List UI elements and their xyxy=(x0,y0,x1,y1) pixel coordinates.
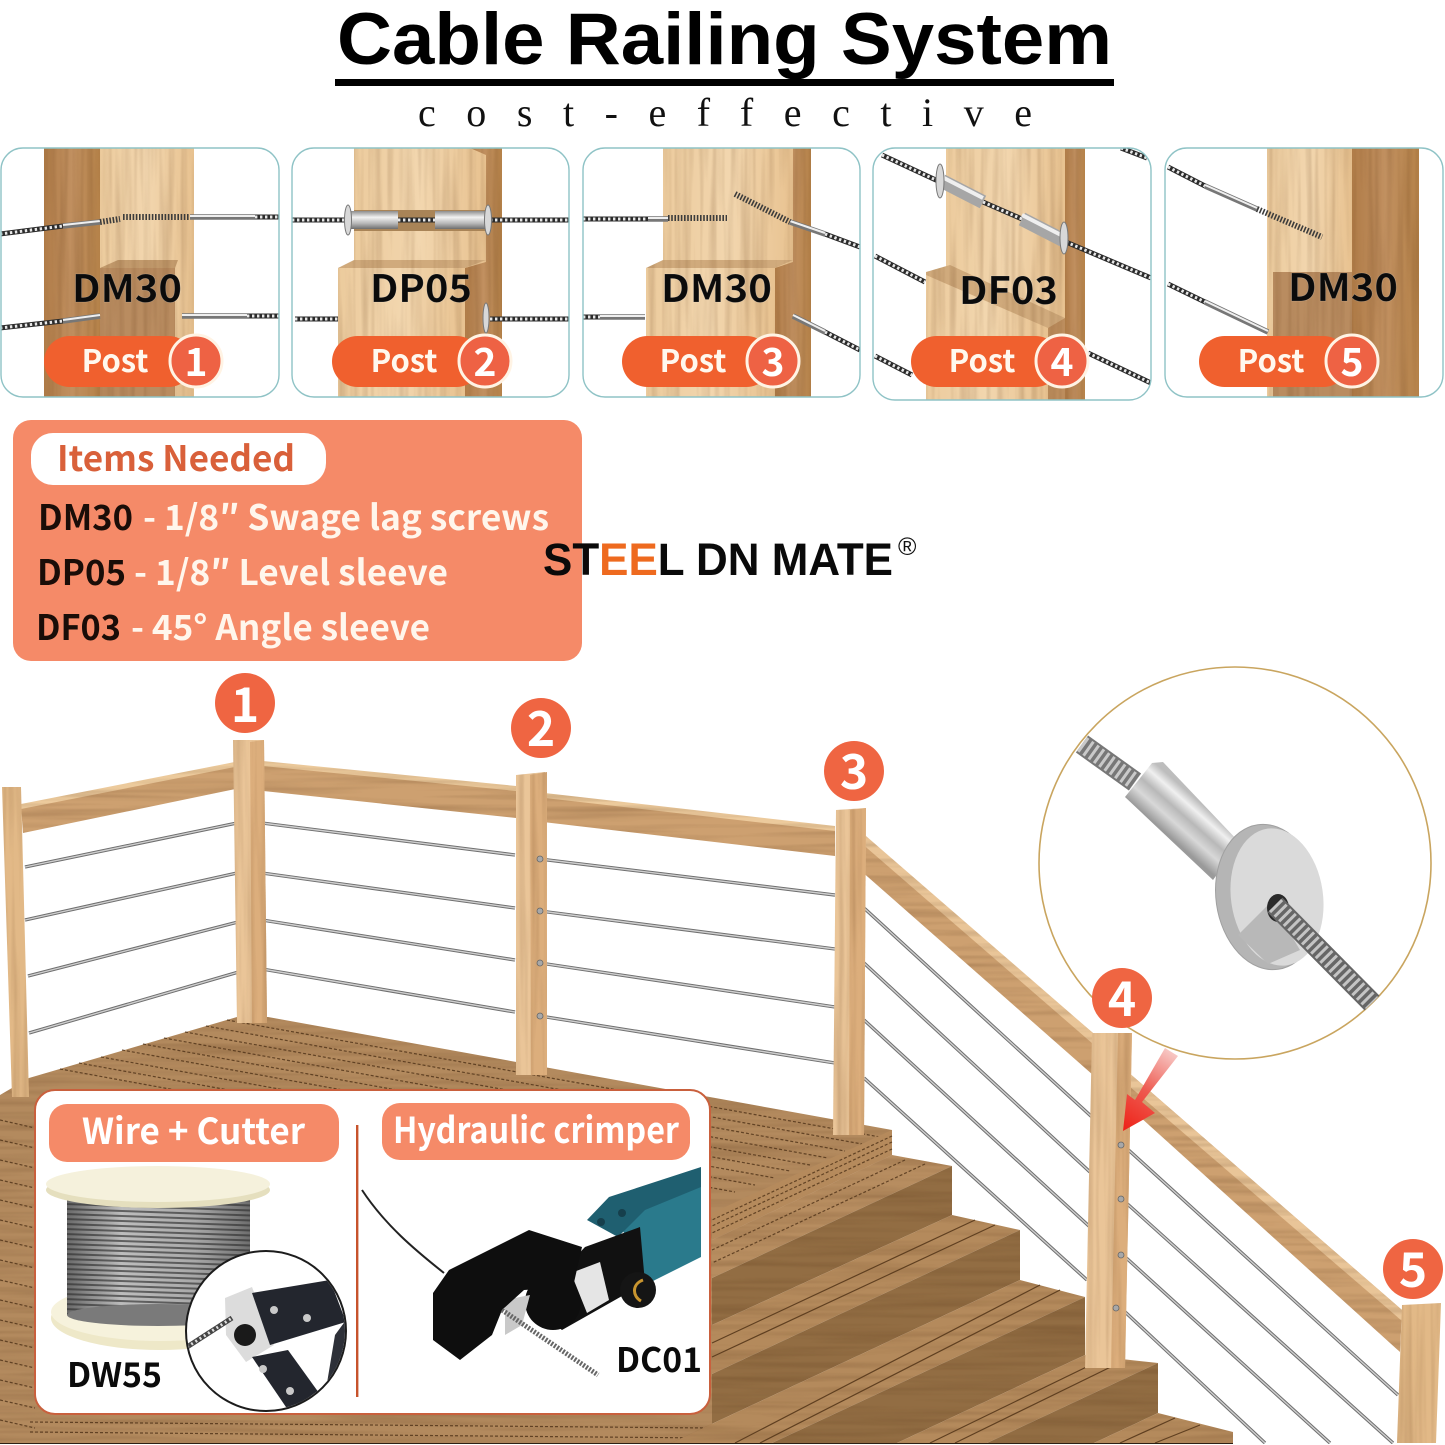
panel: post 2: Post xyxy=(371,336,437,381)
number badge 3: 3 xyxy=(840,733,868,803)
item DP05: DP05 xyxy=(37,545,126,596)
cables xyxy=(25,823,1398,1443)
icon: wire cutter xyxy=(186,1251,346,1411)
panel: post 3: Post xyxy=(660,336,726,381)
panel: post 3: DM30 xyxy=(661,258,772,313)
heading: wire + cutter: Wire + Cutter xyxy=(82,1103,305,1155)
panel: post 1: 1 xyxy=(184,332,208,388)
item DF03: DF03 xyxy=(36,600,121,651)
panel: post 2: DP05 xyxy=(370,258,472,313)
panel: post 5: Post xyxy=(1238,336,1304,381)
railing scene xyxy=(0,740,1441,1444)
number badge 4 xyxy=(1092,960,1152,1030)
stairs xyxy=(0,1155,1233,1444)
items heading: Items Needed xyxy=(57,431,295,482)
callout: fitting close-up xyxy=(1039,667,1431,1059)
number badge 4: 4 xyxy=(1108,960,1136,1030)
deck floor xyxy=(0,1017,892,1443)
label: DW55: DW55 xyxy=(67,1348,162,1397)
cable strand lower xyxy=(1275,905,1372,1003)
panel: post 4: Post xyxy=(949,336,1015,381)
subtitle: cost-effective xyxy=(418,90,1032,135)
item DF03: - 45° Angle sleeve xyxy=(131,600,430,651)
panel: post 2 xyxy=(292,148,569,397)
panel: post 4: DF03 xyxy=(959,260,1058,315)
label: DC01: DC01 xyxy=(616,1333,702,1382)
icon: hydraulic crimper xyxy=(362,1167,701,1375)
panel: post 1 xyxy=(0,148,279,397)
item DM30: DM30 xyxy=(38,490,133,541)
panel: post 2: 2 xyxy=(473,332,497,388)
panel: items needed xyxy=(13,420,582,661)
number badge 3 xyxy=(824,733,884,803)
heading: wire + cutter xyxy=(49,1103,339,1162)
item DP05: - 1/8″ Level sleeve xyxy=(134,545,448,596)
panel: post 3: 3 xyxy=(761,332,785,388)
number badge 2 xyxy=(511,690,571,760)
panel: post 3 xyxy=(583,148,860,397)
number badge 1 xyxy=(215,666,275,736)
number badge 1: 1 xyxy=(231,666,259,736)
panel: post 4: 4 xyxy=(1050,332,1074,388)
posts xyxy=(2,740,1441,1443)
panel: post 5: DM30 xyxy=(1288,257,1398,312)
panel: post 5: 5 xyxy=(1340,332,1364,388)
cable end fittings xyxy=(537,856,1124,1311)
cable strand upper xyxy=(1082,744,1135,782)
panel: post 1: Post xyxy=(82,336,148,381)
logo: ® xyxy=(898,533,917,561)
arrow xyxy=(1123,1048,1178,1131)
number badge 5 xyxy=(1383,1231,1443,1301)
panel: post 5 xyxy=(1165,148,1443,397)
number badge 5: 5 xyxy=(1399,1231,1427,1301)
item DM30: - 1/8″ Swage lag screws xyxy=(143,490,549,541)
icon: wire spool xyxy=(46,1166,270,1350)
flange xyxy=(1206,817,1332,977)
logo: STEEL DN MATE xyxy=(543,534,893,585)
swage tube xyxy=(1125,762,1240,880)
heading: hydraulic crimper: Hydraulic crimper xyxy=(393,1102,679,1154)
number badge 2: 2 xyxy=(527,690,555,760)
top rails xyxy=(21,760,1402,1352)
panel: post 4 xyxy=(873,148,1151,400)
panel: post 1: DM30 xyxy=(72,258,182,313)
panel: tools xyxy=(35,1090,710,1414)
title: Cable Railing System xyxy=(337,0,1112,80)
